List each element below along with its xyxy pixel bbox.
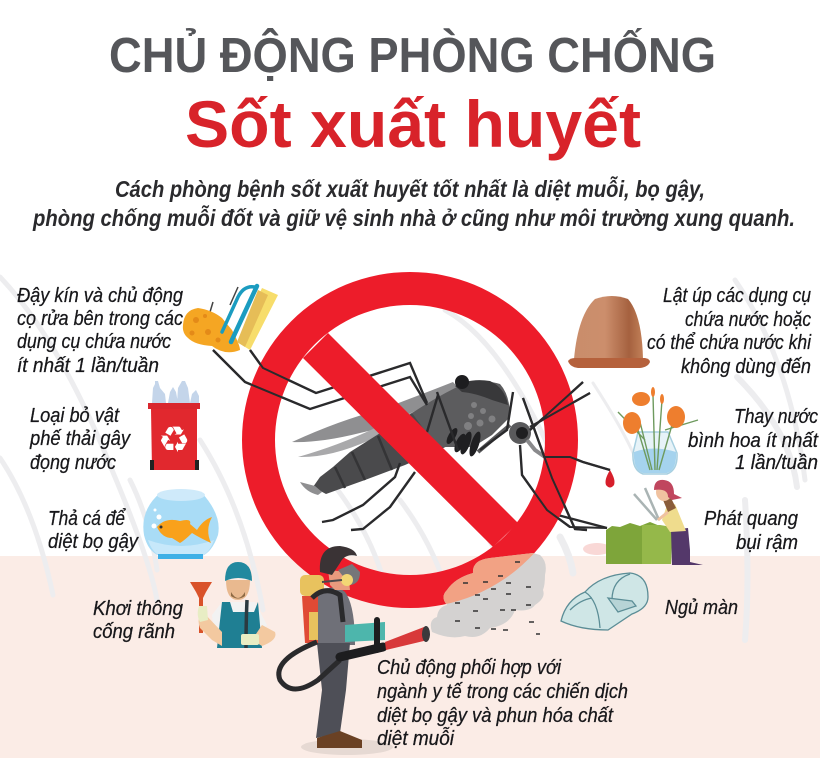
text: fish: diệt bọ gậy xyxy=(48,531,139,553)
text: coordinate with health sector xyxy=(377,657,628,750)
legs xyxy=(213,350,610,530)
text: coordinate with health sector: diệt bọ gậy và phun hóa chất xyxy=(377,705,614,727)
text: fish: Thả cá để xyxy=(48,508,126,530)
text: remove waste: Loại bỏ vật xyxy=(30,405,120,427)
icon: man spraying xyxy=(279,546,430,755)
text: cover and scrub containers xyxy=(17,285,183,377)
icon: upturned pot xyxy=(568,296,650,368)
mosquito legs over ring xyxy=(213,350,610,530)
title: CHỦ ĐỘNG PHÒNG CHỐNG xyxy=(109,28,716,83)
text: cover and scrub containers: cọ rửa bên trong các xyxy=(17,308,183,330)
text: clear bushes: bụi rậm xyxy=(736,532,798,554)
text: change vase water xyxy=(688,406,819,474)
icon: blood drop xyxy=(606,470,614,488)
intro text: Cách phòng bệnh sốt xuất huyết tốt nhất là diệt muỗi, bọ gậy, xyxy=(115,175,705,202)
text: coordinate with health sector: ngành y tế trong các chiến dịch xyxy=(377,681,628,703)
icon: recycling bin xyxy=(148,381,200,470)
text: coordinate with health sector: Chủ động phối hợp với xyxy=(377,657,562,679)
text: cover and scrub containers: ít nhất 1 lần/tuần xyxy=(17,355,159,377)
text: drains: Khơi thông xyxy=(93,598,183,620)
text: drains xyxy=(93,598,183,643)
icon: mosquito net xyxy=(561,573,648,630)
icon: sponge and brush xyxy=(183,286,278,352)
text: fish xyxy=(48,508,139,553)
head xyxy=(509,422,531,444)
subtitle heading: Sốt xuất huyết xyxy=(185,87,641,161)
text: cover and scrub containers: Đậy kín và chủ động xyxy=(17,285,183,307)
icon: fish bowl xyxy=(143,489,219,559)
icon: drain worker xyxy=(190,562,275,648)
text: remove waste: đọng nước xyxy=(30,452,116,474)
icon: recycling bin: ♻ xyxy=(158,420,190,461)
text: remove waste: phế thải gây xyxy=(29,428,131,450)
text: sleep under net: Ngủ màn xyxy=(665,597,738,619)
text: clear bushes: Phát quang xyxy=(704,508,798,530)
icon: flower vase xyxy=(618,387,698,474)
text: clear bushes xyxy=(704,508,798,554)
abdomen xyxy=(313,413,450,494)
icon: mosquito xyxy=(213,350,610,530)
wings xyxy=(292,382,462,442)
text: overturn containers xyxy=(647,285,811,378)
text: drains: cống rãnh xyxy=(93,621,175,643)
icon: smoke with mosquitoes xyxy=(431,553,546,637)
text: remove waste xyxy=(29,405,131,474)
text: coordinate with health sector: diệt muỗi xyxy=(377,727,455,750)
intro text xyxy=(32,175,795,231)
text: cover and scrub containers: dụng cụ chứa nước xyxy=(17,331,171,353)
icon: woman trimming bush xyxy=(583,480,703,565)
icon: prohibition sign xyxy=(242,272,578,608)
thorax xyxy=(412,382,510,447)
